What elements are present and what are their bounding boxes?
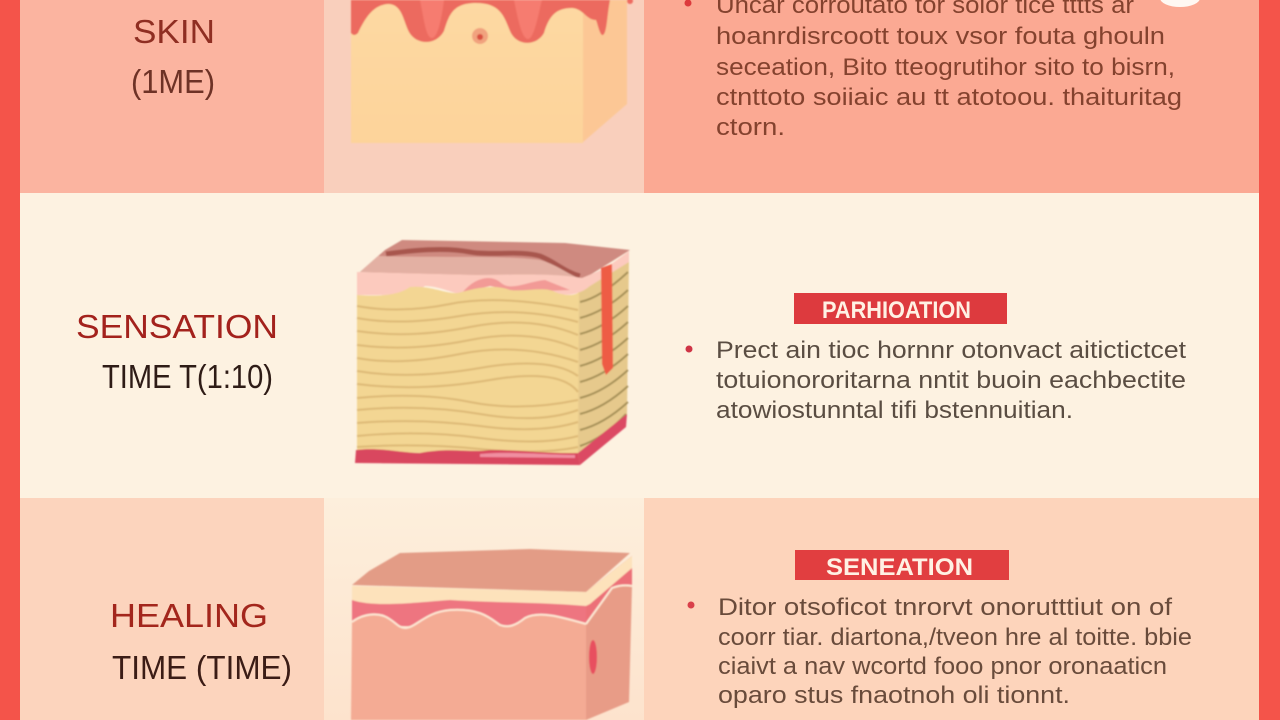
bullet [688, 602, 694, 608]
bullet [686, 346, 692, 352]
body lines: coorr tiar. diartona,/tveon hre al toitte. bbie [718, 624, 1192, 651]
text block: healing description [688, 594, 1192, 709]
heading: skin time [131, 13, 215, 100]
badge: seneation: SENEATION [826, 554, 973, 581]
body lines: oparo stus fnaotnoh oli tionnt. [718, 682, 1070, 709]
heading: healing time [110, 597, 292, 686]
body lines: atowiostunntal tifi bstennuitian. [716, 397, 1073, 424]
body lines [716, 337, 1186, 424]
illustration: skin block with red drips [351, 0, 633, 143]
panel: sensation row [20, 193, 1259, 498]
heading: skin time: SKIN [133, 13, 215, 50]
body lines: Ditor otsoficot tnrorvt onorutttiut on of [718, 594, 1172, 621]
body lines: ctorn. [716, 114, 785, 141]
heading: sensation time: SENSATION [76, 308, 278, 345]
badge: parhioation: PARHIOATION [822, 297, 971, 324]
body lines [716, 0, 1182, 141]
heading: sensation time [76, 308, 278, 395]
heading: sensation time: TIME T(1:10) [102, 358, 273, 395]
body lines: ctnttoto soiiaic au tt atotoou. thaituritag [716, 84, 1182, 111]
body lines: Prect ain tioc hornnr otonvact aitictictcet [716, 337, 1186, 364]
panel: skin row [20, 0, 1259, 193]
bullet [684, 0, 692, 6]
body lines: totuionororitarna nntit buoin eachbectite [716, 367, 1186, 394]
heading: skin time: (1ME) [131, 63, 215, 100]
text block: skin description [684, 0, 1182, 141]
body lines: ciaivt a nav wcortd fooo pnor oronaaticn [718, 653, 1167, 680]
illustration: healing skin block [351, 549, 632, 720]
heading: healing time: HEALING [110, 597, 268, 634]
body lines [718, 594, 1192, 709]
panel: healing row [20, 498, 1259, 720]
badge: parhioation [794, 293, 1007, 324]
text block: sensation description [686, 337, 1186, 424]
decorative white badge remnant [1160, 0, 1200, 7]
body lines: hoanrdisrcoott toux vsor fouta ghouln [716, 23, 1165, 50]
body lines: seceation, Bito tteogrutihor sito to bisrn, [716, 54, 1175, 81]
illustration: layered skin cross-section [355, 240, 630, 465]
heading: healing time: TIME (TIME) [112, 649, 292, 686]
badge: seneation [795, 550, 1009, 581]
